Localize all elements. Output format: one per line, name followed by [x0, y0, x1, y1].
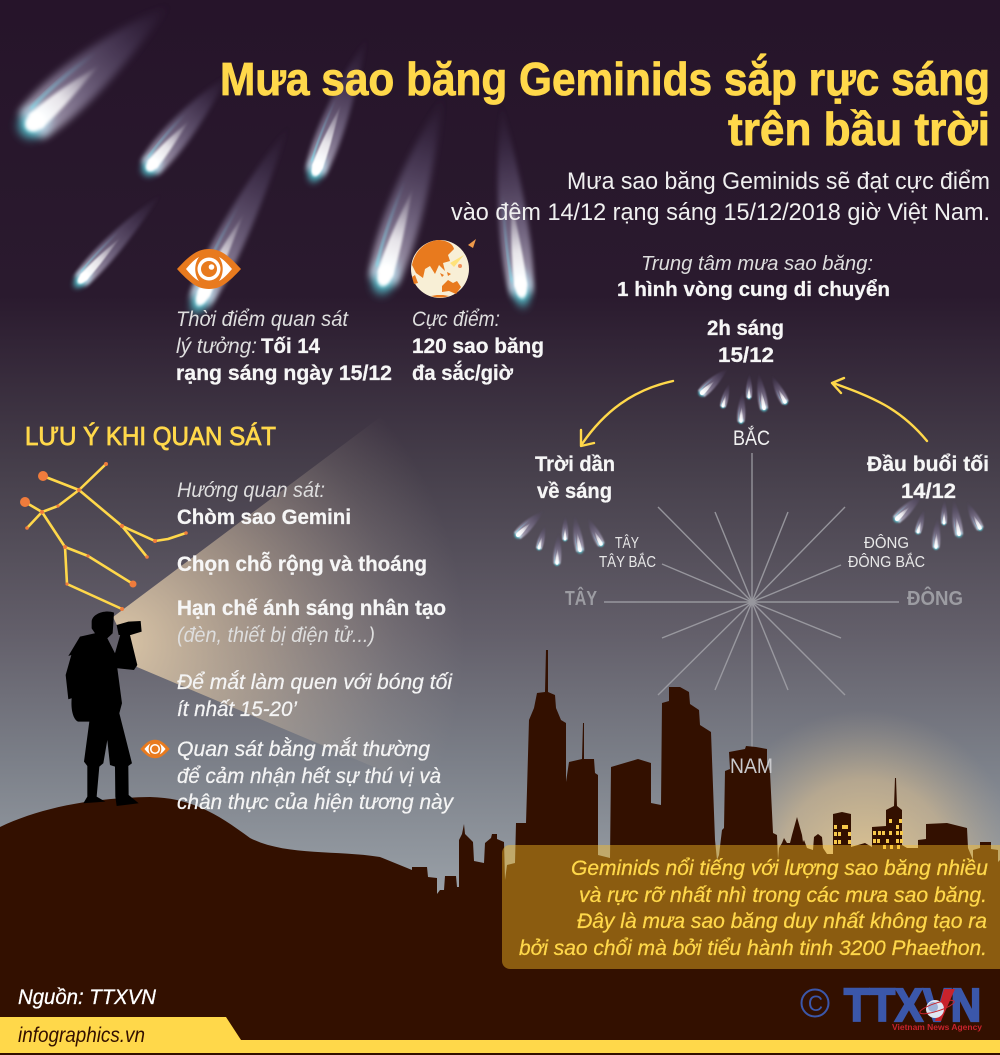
heading: center of shower: Trung tâm mưa sao băng: — [641, 252, 873, 275]
viewing notes list: để cảm nhận hết sự thú vị và — [177, 765, 441, 788]
text: peak rate: Cực điểm: — [412, 308, 500, 331]
meteor shower: west — [512, 506, 606, 566]
label: 2h 15/12: 2h sáng — [707, 317, 784, 340]
icon: small eye — [140, 740, 170, 758]
website: infographics.vn — [18, 1024, 145, 1047]
logo: TTXVN: Vietnam News Agency — [892, 1022, 982, 1032]
compass label: east-northeast — [848, 533, 925, 571]
logo: TTXVN: TTXVN — [844, 979, 981, 1031]
label: towards morning — [535, 453, 615, 503]
label: early evening — [867, 453, 989, 503]
text: observation time: lý tưởng: — [176, 335, 257, 358]
viewing notes list: Hạn chế ánh sáng nhân tạo — [177, 597, 446, 620]
compass label: east: ĐÔNG — [907, 586, 963, 610]
compass label: north: BẮC — [733, 426, 770, 450]
text: observation time: Tối 14 — [261, 335, 320, 358]
viewing notes list: (đèn, thiết bị điện tử...) — [177, 624, 375, 647]
text: peak rate: 120 sao băng — [412, 335, 544, 358]
callout: Geminids facts: Geminids nổi tiếng với lượng sao băng nhiều — [571, 857, 988, 880]
viewing notes list: chân thực của hiện tương này — [177, 791, 454, 814]
compass label: west-northwest: TÂY BẮC — [599, 552, 656, 571]
footer band — [0, 1017, 1000, 1053]
meteor shower: north — [696, 364, 790, 424]
viewing notes list: Hướng quan sát: — [177, 479, 325, 502]
callout: Geminids facts: Đây là mưa sao băng duy nhất không tạo ra — [577, 910, 987, 933]
text: observation time: rạng sáng ngày 15/12 — [176, 362, 392, 385]
label: towards morning: Trời dần — [535, 453, 615, 476]
viewing notes list: Để mắt làm quen với bóng tối — [177, 671, 453, 694]
title: trên bầu trời — [728, 103, 990, 155]
label: towards morning: về sáng — [537, 480, 612, 503]
subtitle: vào đêm 14/12 rạng sáng 15/12/2018 giờ Việt Nam. — [451, 199, 990, 226]
heading: center of shower — [617, 252, 890, 301]
compass label: east-northeast: ĐÔNG — [864, 533, 909, 552]
arrow: to west — [581, 381, 673, 446]
viewing notes list: Chòm sao Gemini — [177, 506, 351, 529]
meteor shower: east — [891, 490, 985, 550]
compass label: east-northeast: ĐÔNG BẮC — [848, 552, 925, 571]
label: 2h 15/12 — [707, 317, 784, 367]
meteors — [8, 0, 538, 318]
callout: Geminids facts — [502, 845, 1000, 969]
viewing notes list: Quan sát bằng mắt thường — [177, 738, 430, 761]
viewing notes list: ít nhất 15-20’ — [177, 698, 297, 721]
heading: viewing notes: LƯU Ý KHI QUAN SÁT — [25, 421, 276, 451]
compass label: west-northwest — [599, 533, 656, 571]
compass label: west: TÂY — [565, 586, 598, 610]
ground and city skyline — [0, 650, 1000, 1055]
logo: TTXVN: C — [808, 991, 823, 1016]
text: observation time: Thời điểm quan sát — [176, 308, 349, 331]
arrow: from east — [832, 378, 927, 441]
label: 2h 15/12: 15/12 — [718, 344, 774, 367]
text: observation time — [176, 308, 392, 385]
photographer silhouette — [66, 612, 142, 806]
horizon glow — [680, 690, 1000, 930]
source: Nguồn: TTXVN — [18, 986, 157, 1009]
constellation Gemini — [20, 462, 188, 611]
viewing notes list: Chọn chỗ rộng và thoáng — [177, 552, 427, 576]
icon: globe with meteor — [411, 239, 476, 298]
callout: Geminids facts: bởi sao chổi mà bởi tiểu hành tinh 3200 Phaethon. — [519, 937, 987, 960]
observation light beam — [113, 335, 490, 816]
subtitle: Mưa sao băng Geminids sẽ đạt cực điểm — [567, 168, 990, 195]
icon: eye — [177, 249, 241, 289]
title — [220, 53, 990, 155]
label: early evening: Đầu buổi tối — [867, 453, 989, 476]
compass label: south: NAM — [730, 755, 773, 778]
heading: center of shower: 1 hình vòng cung di chuyển — [617, 278, 890, 301]
text: peak rate: đa sắc/giờ — [412, 361, 513, 385]
label: early evening: 14/12 — [901, 480, 956, 503]
compass radial lines — [604, 453, 899, 750]
compass label: west-northwest: TÂY — [615, 533, 639, 552]
lit building windows — [834, 819, 903, 849]
text: peak rate — [412, 308, 544, 385]
subtitle — [451, 168, 990, 226]
viewing notes list — [177, 479, 454, 814]
callout: Geminids facts: và rực rỡ nhất nhì trong các mưa sao băng. — [579, 884, 987, 907]
